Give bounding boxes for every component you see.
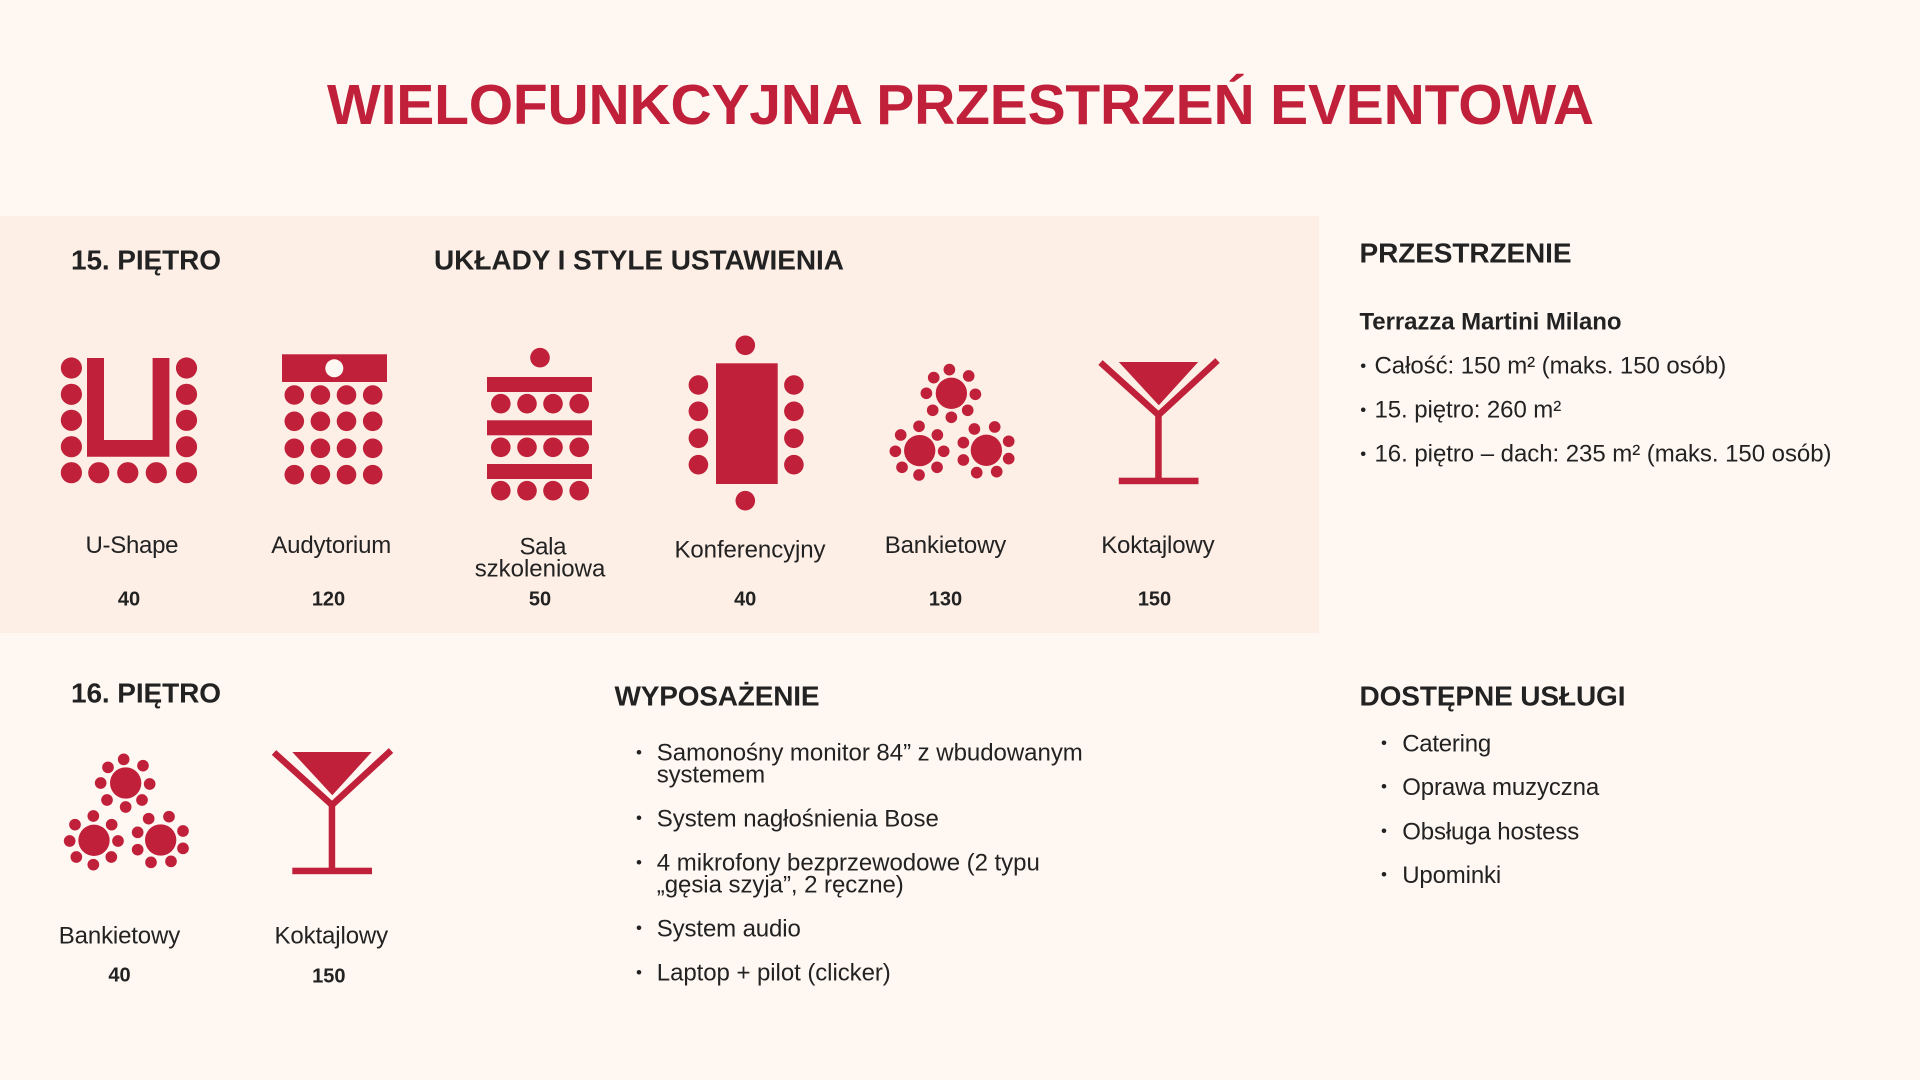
label: Bankietowy: Bankietowy [885, 532, 1006, 559]
list item: monitor: • [636, 743, 642, 762]
capacity: U-Shape: 40 [118, 589, 140, 611]
venue name: Terrazza Martini Milano [1360, 308, 1622, 335]
list item: laptop: Laptop + pilot (clicker) [657, 960, 891, 987]
panel: equipment [614, 681, 1083, 987]
list item: sound system: • [636, 809, 642, 828]
heading: equipment: WYPOSAŻENIE [614, 681, 820, 712]
label: U-Shape: U-Shape [86, 532, 178, 559]
list item: monitor: systemem [657, 762, 765, 789]
list item: 15th floor: 15. piętro: 260 m² [1374, 396, 1561, 423]
panel: 16th floor [59, 678, 391, 988]
icon: classroom [487, 348, 592, 501]
heading: layouts: UKŁADY I STYLE USTAWIENIA [434, 245, 844, 276]
icon: banquet tables [64, 753, 189, 870]
panel: services [1360, 681, 1626, 889]
list item: total: Całość: 150 m² (maks. 150 osób) [1374, 352, 1726, 379]
layout: Sala szkoleniowa [475, 348, 606, 611]
list item: catering: • [1381, 734, 1387, 753]
label: Sala szkoleniowa: Sala [520, 533, 567, 560]
capacity: Koktajlowy: 150 [312, 966, 345, 988]
list item: music: • [1381, 777, 1387, 796]
panel: 15th floor [0, 216, 1319, 633]
layout: Konferencyjny [674, 336, 826, 611]
list item: microphones: 4 mikrofony bezprzewodowe (2 typu [657, 850, 1040, 877]
list item: 16th floor: • [1360, 444, 1366, 463]
list item: catering: Catering [1402, 731, 1491, 758]
list item: microphones [636, 850, 1040, 898]
label: Sala szkoleniowa [475, 533, 606, 582]
icon: cocktail glass [274, 750, 391, 874]
list item: laptop: • [636, 963, 642, 982]
label: Bankietowy: Bankietowy [59, 922, 180, 949]
label: Konferencyjny: Konferencyjny [674, 536, 826, 563]
list item: 15th floor: • [1360, 400, 1366, 419]
layout: Bankietowy 16th floor [59, 753, 189, 987]
icon: U-shape [61, 357, 197, 483]
label: Audytorium: Audytorium [271, 532, 391, 559]
list item: monitor: Samonośny monitor 84” z wbudowanym [657, 740, 1083, 767]
list item: microphones: „gęsia szyja”, 2 ręczne) [657, 871, 904, 898]
heading: services: DOSTĘPNE USŁUGI [1360, 681, 1626, 712]
list item: microphones: • [636, 853, 642, 872]
heading: 15th floor: 15. PIĘTRO [71, 245, 221, 276]
list item: gifts: • [1381, 865, 1387, 884]
capacity: Bankietowy: 130 [929, 589, 962, 611]
capacity: Konferencyjny: 40 [734, 589, 756, 611]
layout: Audytorium [271, 354, 391, 611]
layout: Koktajlowy 15th floor [1100, 360, 1218, 611]
list item: monitor [636, 740, 1083, 789]
label: Koktajlowy: Koktajlowy [1101, 532, 1215, 559]
list item: audio: • [636, 919, 642, 938]
list item: total: • [1360, 356, 1366, 375]
list item: hostess: • [1381, 821, 1387, 840]
icon: boardroom [689, 336, 804, 511]
list item: music: Oprawa muzyczna [1402, 774, 1600, 801]
list item: sound system: System nagłośnienia Bose [657, 805, 939, 832]
capacity: Bankietowy: 40 [108, 965, 131, 987]
heading: spaces: PRZESTRZENIE [1360, 238, 1572, 269]
list item: audio: System audio [657, 915, 801, 942]
heading: 16th floor: 16. PIĘTRO [71, 678, 221, 709]
capacity: Audytorium: 120 [312, 589, 345, 611]
layout: Koktajlowy 16th floor [274, 750, 391, 988]
panel: spaces [1360, 238, 1832, 467]
layout: U-Shape [61, 357, 197, 611]
layout: Bankietowy 15th floor [885, 364, 1015, 611]
list item: gifts: Upominki [1402, 862, 1501, 889]
list item: 16th floor: 16. piętro – dach: 235 m² (maks. 150 osób) [1374, 440, 1832, 467]
list item: hostess: Obsługa hostess [1402, 818, 1579, 845]
capacity: Sala szkoleniowa: 50 [529, 589, 551, 611]
icon: auditorium [282, 354, 387, 485]
label: Sala szkoleniowa: szkoleniowa [475, 555, 606, 582]
label: Koktajlowy: Koktajlowy [274, 922, 388, 949]
panel background [0, 216, 1319, 633]
icon: cocktail glass [1100, 360, 1218, 484]
title: WIELOFUNKCYJNA PRZESTRZEŃ EVENTOWA [327, 73, 1594, 137]
capacity: Koktajlowy: 150 [1138, 589, 1171, 611]
icon: banquet tables [890, 364, 1015, 481]
